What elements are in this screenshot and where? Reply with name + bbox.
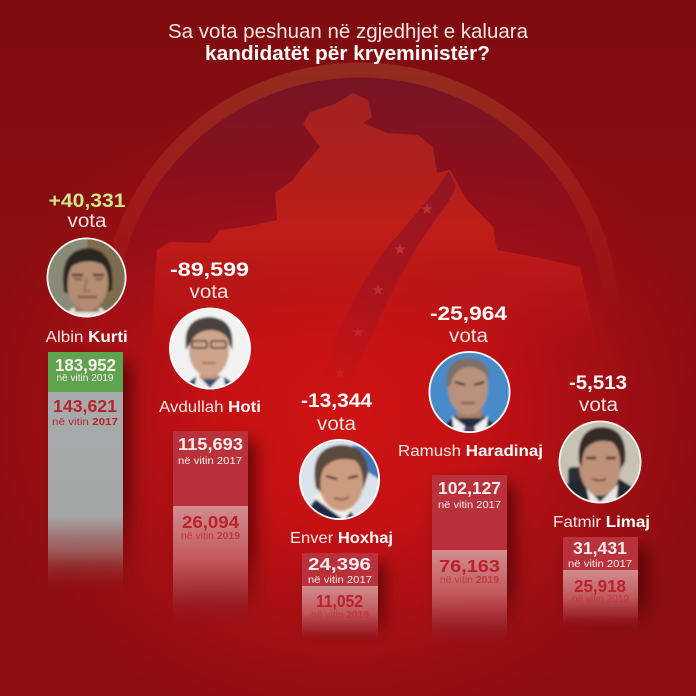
bar xyxy=(302,553,385,644)
candidate: Albin Kurti: vota xyxy=(68,211,107,232)
bar: në vitin 2017 xyxy=(52,416,118,428)
candidate: Fatmir Limaj xyxy=(553,372,650,630)
name: Avdullah Hoti xyxy=(159,399,261,416)
vote change: +40,331 xyxy=(48,190,126,212)
portrait xyxy=(169,308,251,390)
bar: në vitin 2019 xyxy=(311,609,369,621)
bar: 102,127 xyxy=(438,478,501,498)
bar xyxy=(173,431,256,626)
name: Ramush Haradinaj xyxy=(398,443,543,460)
bar: 76,163 xyxy=(439,556,500,576)
map silhouette xyxy=(150,93,600,360)
title: kandidatët për kryeministër? xyxy=(205,42,490,65)
vote change: -13,344 xyxy=(301,390,372,412)
bar: 24,396 xyxy=(308,554,371,574)
bar: në vitin 2019 xyxy=(440,574,499,586)
bar: 115,693 xyxy=(178,434,243,454)
candidate: Enver Hoxhaj: vota xyxy=(317,414,356,435)
bar xyxy=(432,475,515,646)
candidate: Enver Hoxhaj xyxy=(290,390,393,644)
bar: 31,431 xyxy=(573,538,627,558)
bar: në vitin 2019 xyxy=(56,372,114,384)
bar: në vitin 2017 xyxy=(568,558,632,570)
bar xyxy=(48,352,131,592)
candidate: Avdullah Hoti xyxy=(159,259,261,626)
name: Fatmir Limaj xyxy=(553,514,650,531)
bar: në vitin 2017 xyxy=(308,574,372,586)
vote change: -89,599 xyxy=(170,259,249,281)
portrait xyxy=(46,237,127,320)
map band with stars: ★ xyxy=(393,241,407,258)
map band with stars: ★ xyxy=(420,201,434,218)
bar: 26,094 xyxy=(182,512,239,532)
portrait xyxy=(299,439,380,520)
bar: 25,918 xyxy=(574,576,626,596)
vote change: -5,513 xyxy=(569,372,627,394)
bar: 183,952 xyxy=(55,355,116,375)
background emblem: ring and map of Kosovo xyxy=(108,70,612,574)
bar: 143,621 xyxy=(53,396,117,416)
bar: 11,052 xyxy=(316,591,363,611)
candidate: Fatmir Limaj: vota xyxy=(579,395,618,416)
map band with stars: ★ xyxy=(371,282,385,299)
vote change: -25,964 xyxy=(430,303,507,325)
map band with stars xyxy=(312,171,456,405)
candidate: Ramush Haradinaj xyxy=(398,303,543,646)
bar: në vitin 2017 xyxy=(438,499,501,511)
candidate: Albin Kurti xyxy=(46,190,131,592)
bar: në vitin 2019 xyxy=(181,530,240,542)
portrait xyxy=(558,420,642,504)
bar: në vitin 2017 xyxy=(178,455,242,467)
name: Enver Hoxhaj xyxy=(290,530,393,547)
bar xyxy=(563,537,646,630)
map band with stars: ★ xyxy=(333,365,347,382)
bar: në vitin 2019 xyxy=(572,593,629,605)
portrait xyxy=(428,351,510,433)
title xyxy=(168,20,529,65)
map band with stars: ★ xyxy=(351,324,365,341)
name: Albin Kurti xyxy=(46,329,128,346)
emblem disc xyxy=(115,77,605,567)
emblem ring xyxy=(108,70,612,574)
candidate: Avdullah Hoti: vota xyxy=(190,282,229,303)
candidate: Ramush Haradinaj: vota xyxy=(449,326,488,347)
title: Sa vota peshuan në zgjedhjet e kaluara xyxy=(168,20,529,43)
